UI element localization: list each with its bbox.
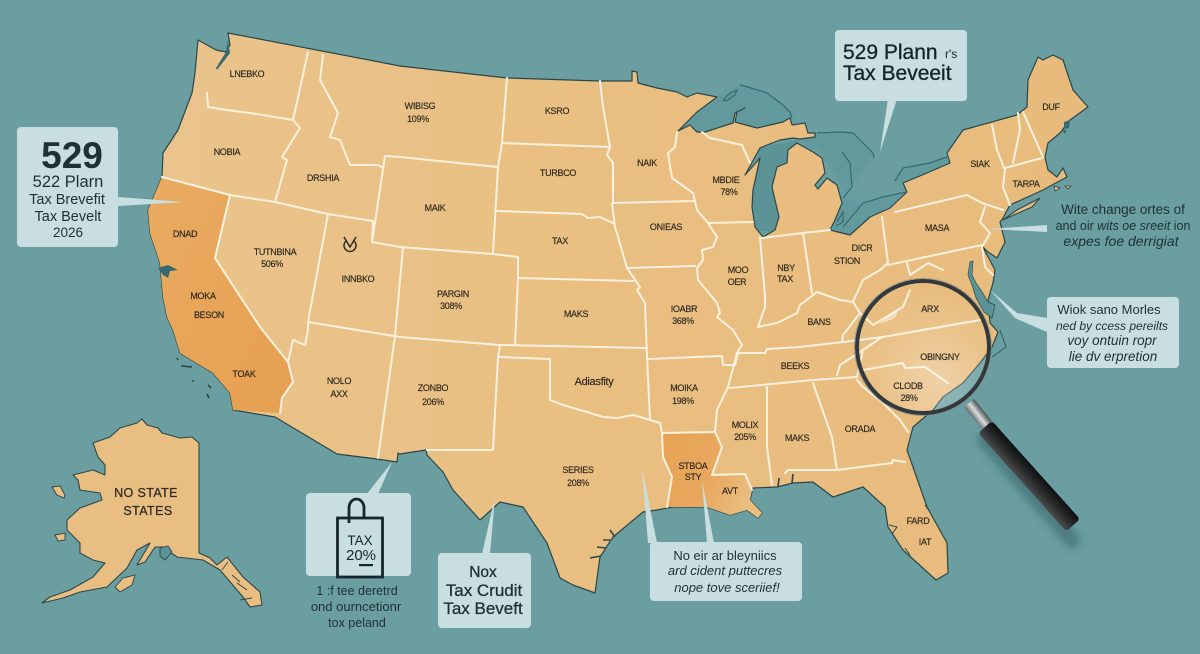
- state labels: TAX: [777, 274, 793, 284]
- callout: tax bag: tox peland: [328, 616, 386, 630]
- state labels: MAKS: [785, 433, 809, 443]
- lakes and coastal details: [158, 40, 1071, 558]
- callout: bottom note: nope tove sceriief!: [674, 580, 780, 595]
- state labels: MOKA: [190, 291, 216, 301]
- callout: left 529 panel: 529: [41, 135, 103, 176]
- callout: tax bag: [306, 462, 411, 630]
- state labels: INNBKO: [342, 274, 375, 284]
- highlighted state: Louisiana: [662, 432, 762, 518]
- state labels: DICR: [852, 243, 873, 253]
- state labels: NOBIA: [214, 147, 241, 157]
- state labels: DRSHIA: [307, 173, 339, 183]
- neck: [969, 403, 987, 425]
- state labels: BESON: [194, 310, 224, 320]
- callout: left 529 panel: Tax Brevefit: [29, 192, 105, 208]
- state labels: IAT: [919, 537, 932, 547]
- state labels: KSRO: [545, 106, 569, 116]
- state labels: TARPA: [1012, 179, 1040, 189]
- state labels: 78%: [720, 187, 738, 197]
- callout: right box note: lie dv erpretion: [1069, 349, 1157, 364]
- state labels: TUTNBINA: [254, 247, 297, 257]
- Alaska label: NO STATE: [114, 486, 178, 500]
- land outline: [148, 33, 1088, 593]
- map: contiguous United States: [148, 33, 1088, 593]
- state labels: TOAK: [232, 369, 256, 379]
- icon: Utah symbol: [344, 237, 356, 251]
- Alaska islands and inlets: [52, 486, 252, 600]
- state labels: ORADA: [845, 424, 876, 434]
- state labels: MAIK: [425, 203, 446, 213]
- callout: Nox tax credit: [438, 497, 531, 628]
- state labels: OER: [728, 277, 747, 287]
- callout: bottom note: [642, 468, 802, 601]
- lens labels: OBINGNY: [920, 352, 960, 362]
- state labels: 198%: [672, 396, 694, 406]
- state labels: Adiasfity: [575, 376, 614, 388]
- state labels: IOABR: [671, 304, 698, 314]
- state labels: STION: [834, 256, 860, 266]
- highlighted state: California: [148, 177, 293, 413]
- glare: [878, 307, 900, 325]
- state labels: WIBISG: [405, 101, 436, 111]
- icon: tax bag: TAX: [347, 533, 373, 548]
- state labels: 208%: [567, 478, 589, 488]
- state labels: FARD: [907, 516, 930, 526]
- state labels: BANS: [807, 317, 831, 327]
- state labels: DUF: [1042, 102, 1061, 112]
- state labels: MAKS: [564, 309, 588, 319]
- great lakes water: [678, 85, 950, 237]
- callout: left 529 panel: 2026: [53, 225, 83, 240]
- state labels: NBY: [777, 263, 795, 273]
- state labels: NAIK: [637, 158, 657, 168]
- state labels: DNAD: [173, 229, 198, 239]
- callout: left 529 panel: Tax Bevelt: [35, 209, 101, 225]
- state labels: 205%: [734, 432, 756, 442]
- Alaska label: [114, 486, 178, 518]
- callout: right box note: Wiok sano Morles: [1057, 302, 1161, 317]
- callout: left 529 panel: [17, 127, 184, 247]
- state labels: SERIES: [562, 465, 594, 475]
- icon: tax bag: [338, 499, 382, 577]
- state labels: LNEBKO: [230, 69, 265, 79]
- callout: tax bag: ond ourncetionr: [311, 599, 402, 614]
- callout: top 529 plan: Tax Beveeit: [843, 62, 952, 85]
- state labels: NOLO: [327, 376, 351, 386]
- state labels: MOIKA: [670, 383, 698, 393]
- callout: left 529 panel: 522 Plarn: [33, 173, 103, 191]
- state labels: ONIEAS: [650, 222, 682, 232]
- lens labels: ARX: [921, 304, 939, 314]
- handle shadow: [985, 440, 1072, 540]
- state labels: MASA: [925, 223, 949, 233]
- lens labels: 28%: [900, 393, 918, 403]
- state labels: 109%: [407, 114, 429, 124]
- magnifying glass: [854, 278, 1080, 540]
- callout: bottom note: No eir ar bleyniics: [673, 548, 777, 563]
- callout: right plain text note: [988, 202, 1190, 249]
- lens labels: CLODB: [893, 381, 923, 391]
- callout: Nox tax credit: Nox: [469, 564, 497, 581]
- Long Island: [1003, 198, 1040, 220]
- callout: right plain text note: and oir wits oe sreeit ion: [1056, 219, 1190, 233]
- callout: right box note: voy ontuin ropr: [1067, 333, 1157, 348]
- state labels: TURBCO: [540, 168, 576, 178]
- state labels: BEEKS: [781, 361, 810, 371]
- lens: [857, 281, 989, 413]
- state labels: AXX: [330, 389, 348, 399]
- state labels: [173, 69, 1061, 547]
- state labels: SIAK: [970, 159, 990, 169]
- callout: bottom note: ard cident puttecres: [668, 563, 783, 578]
- Alaska label: STATES: [123, 504, 173, 518]
- Alaska mainland: [42, 419, 262, 607]
- state labels: MBDIE: [712, 175, 740, 185]
- state labels: TAX: [552, 236, 568, 246]
- callout: Nox tax credit: Tax Crudit: [446, 581, 523, 600]
- icon: tax bag: 20%: [346, 547, 376, 564]
- ring: [857, 281, 989, 413]
- state labels: 506%: [261, 259, 283, 269]
- state labels: 368%: [672, 316, 694, 326]
- state labels: PARGIN: [437, 289, 469, 299]
- handle: [978, 421, 1080, 531]
- callout: Nox tax credit: Tax Beveft: [443, 599, 523, 618]
- map: Alaska: [42, 419, 262, 607]
- state labels: 206%: [422, 397, 444, 407]
- state borders: [162, 52, 1043, 507]
- callout: right box note: [990, 290, 1179, 368]
- state labels: STBOA: [678, 461, 708, 471]
- callout: right plain text note: expes foe derrigiat: [1063, 233, 1180, 249]
- state labels: MOO: [728, 265, 749, 275]
- lens labels: [893, 304, 960, 403]
- state labels: ZONBO: [418, 383, 449, 393]
- state labels: AVT: [722, 486, 739, 496]
- callout: top 529 plan: 529 Plann: [843, 41, 938, 64]
- callout: top 529 plan: [835, 30, 967, 152]
- state labels: 308%: [440, 301, 462, 311]
- callout: tax bag: 1 :f tee deretrd: [316, 584, 398, 598]
- callout: right plain text note: Wite change ortes of: [1061, 202, 1185, 217]
- state labels: MOLIX: [732, 420, 759, 430]
- callout: top 529 plan: r's: [945, 47, 957, 61]
- callout: right box note: ned by ccess pereilts: [1056, 319, 1168, 333]
- state labels: STY: [685, 472, 702, 482]
